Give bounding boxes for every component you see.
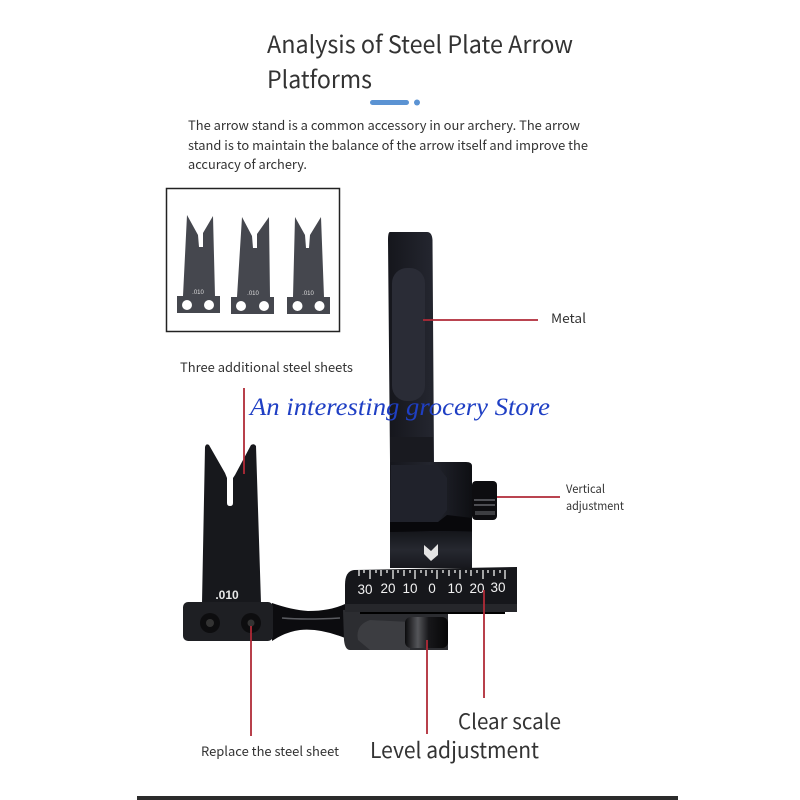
leader lines [244,320,560,736]
icon: steel sheet 1: .010 [192,290,204,296]
scale ticks [359,570,505,579]
label: three additional steel sheets: Three additional steel sheets [180,357,353,376]
label: clear scale: Clear scale [458,706,561,736]
label: vertical adjustment [566,481,625,514]
title second line: Platforms [267,60,372,95]
label: level adjustment: Level adjustment [370,733,539,765]
intro text block: stand is to maintain the balance of the arrow itself and improve the [188,135,588,154]
upright metal arm [388,232,472,568]
steel sheet plate [202,444,261,603]
scale dial [345,567,517,612]
metal pill inset [392,268,425,401]
vertical adjustment knob [472,481,497,520]
white chevron marker [424,544,438,561]
intro text block: accuracy of archery. [188,154,307,173]
arrow platform device [183,232,517,650]
bottom rule [137,796,678,800]
arm shoulder [390,437,433,462]
plate marking: .010 [215,588,239,602]
icon: steel sheet 3: .010 [302,291,314,297]
title: Analysis of Steel Plate Arrow [267,25,573,60]
label: replace the steel sheet: Replace the steel sheet [201,741,339,760]
lower body [343,610,448,650]
intro text block [188,115,588,173]
icon: steel sheet 2: .010 [247,291,259,297]
title accent: blue dash and dot [370,100,420,106]
scale numbers: 20 [380,581,396,596]
scale numbers: 0 [428,581,436,596]
label: metal: Metal [551,308,586,327]
arm mount block [390,465,447,522]
panel: three additional steel sheets [166,188,340,332]
icon: steel sheet 3 [287,217,330,314]
connecting tube [272,603,345,641]
icon: steel sheet 1 [177,215,220,313]
level adjustment knob [405,617,448,648]
clamp with two screws [183,602,273,641]
label: vertical adjustment: adjustment [566,498,625,514]
scale numbers: 30 [357,582,373,597]
scale numbers: 10 [447,581,463,596]
scale numbers [357,580,506,597]
scale numbers: 10 [402,581,418,596]
intro text block: The arrow stand is a common accessory in our archery. The arrow [188,115,581,134]
scale numbers: 20 [469,581,485,596]
label: vertical adjustment: Vertical [566,481,605,497]
scale numbers: 30 [490,580,506,595]
store watermark: An interesting grocery Store [248,394,550,421]
icon: steel sheet 2 [231,217,274,314]
